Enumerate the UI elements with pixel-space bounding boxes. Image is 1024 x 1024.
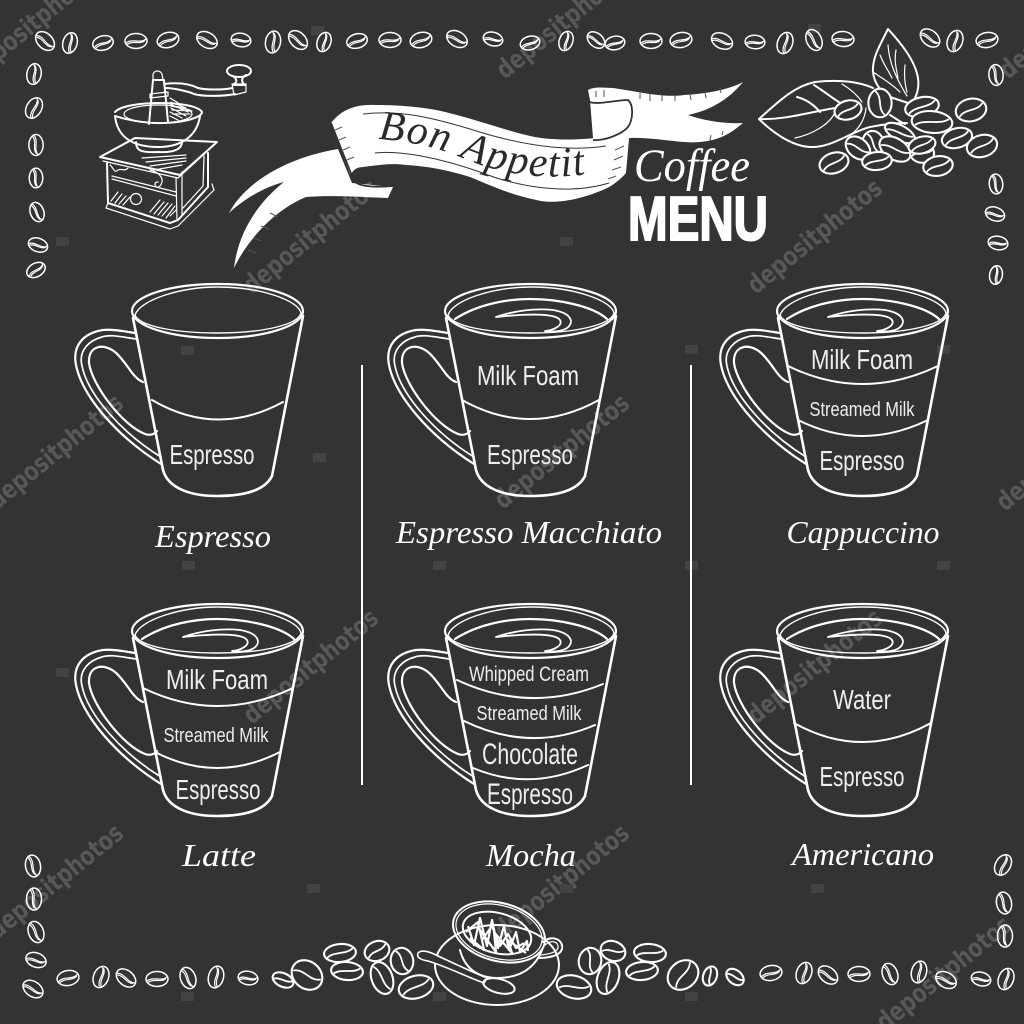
label: Espresso: Espresso [154, 518, 271, 554]
cup: Latte [75, 604, 303, 816]
cup: Americano: Espresso [820, 761, 904, 792]
title: Coffee: Coffee [634, 140, 750, 192]
cup: Mocha: Espresso [487, 778, 573, 811]
label: Cappuccino: Cappuccino [786, 514, 940, 550]
cup: Mocha: Chocolate [482, 738, 578, 771]
ribbon right tail [588, 82, 743, 142]
icon: coffee cup on saucer with spoon [418, 892, 562, 1005]
watermarks: depositphotos [489, 818, 636, 945]
watermarks: depositphotos [742, 173, 889, 300]
cup: Cappuccino: Streamed Milk [810, 399, 915, 421]
icon: coffee grinder [100, 65, 251, 229]
watermarks: depositphotos [238, 603, 385, 730]
label: Latte: Latte [181, 837, 256, 873]
bottom right bean cluster [554, 938, 747, 1002]
ribbon main band [331, 105, 631, 202]
label: Espresso Macchiato: Espresso Macchiato [395, 514, 662, 550]
cup: Latte: Milk Foam [166, 664, 268, 695]
cup: Espresso: Espresso [170, 439, 254, 470]
cup: Espresso Macchiato: Espresso [487, 439, 573, 470]
cup: Mocha: Streamed Milk [476, 703, 582, 725]
cup: Cappuccino: Milk Foam [811, 344, 913, 375]
top bean border [32, 25, 999, 56]
cup: Mocha [388, 604, 616, 816]
cup: Espresso Macchiato: Milk Foam [477, 360, 579, 391]
divider left [361, 365, 363, 785]
cup: Espresso [75, 284, 303, 496]
upper leaf [873, 29, 918, 103]
large leaf [759, 81, 907, 147]
label: Americano: Americano [790, 836, 934, 872]
right top bean border [983, 64, 1009, 285]
cup: Espresso Macchiato [388, 284, 616, 496]
banner: Bon Appetit ribbon [229, 82, 743, 268]
cup: Cappuccino: Espresso [820, 445, 904, 476]
cup: Latte: Espresso [176, 774, 260, 805]
bottom left bean cluster [270, 938, 436, 1002]
ribbon guide lines [363, 113, 609, 189]
cup: Americano: Water [833, 684, 891, 715]
watermarks: depositphotos [742, 603, 889, 730]
cup: Americano [720, 604, 948, 816]
cup: Cappuccino [720, 284, 948, 496]
cup: Latte: Streamed Milk [164, 725, 269, 747]
banner text: Bon Appetit [378, 112, 584, 182]
ribbon left tail [229, 149, 393, 268]
title: MENU: MENU [628, 185, 768, 254]
watermarks: depositphotos [489, 388, 636, 515]
left top bean border [22, 62, 50, 281]
ribbon hatching [248, 88, 723, 253]
watermarks: depositphotos [238, 173, 385, 300]
bottom right bean border [759, 852, 1017, 992]
ribbon fold outlines [331, 100, 632, 187]
cup: Mocha: Whipped Cream [469, 663, 589, 686]
label: Mocha: Mocha [485, 837, 576, 873]
icon: leaves and coffee beans [759, 29, 1000, 178]
bottom left bean border [20, 854, 259, 1001]
divider right [690, 365, 692, 785]
